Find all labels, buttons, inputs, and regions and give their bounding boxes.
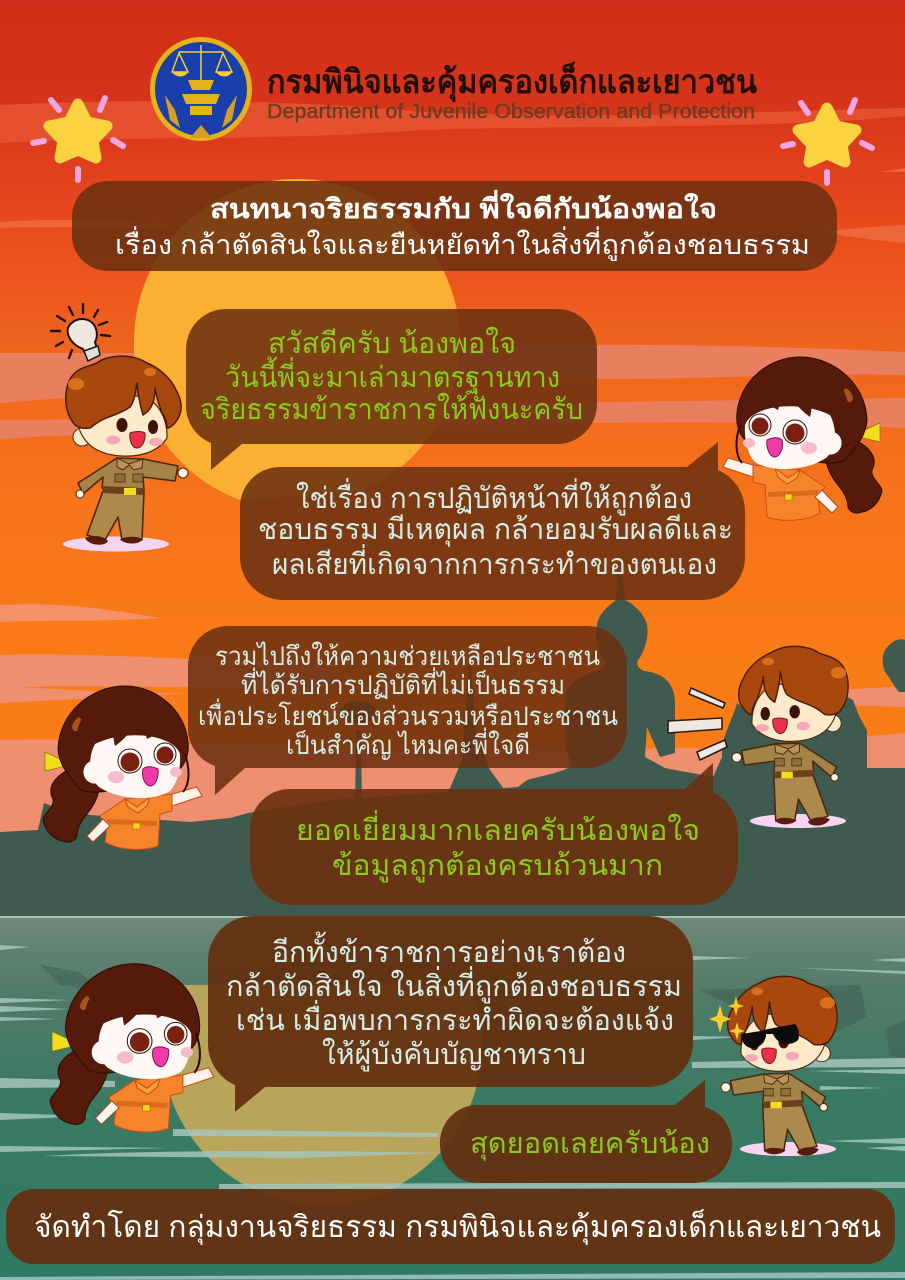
character: boy presenter (63, 356, 188, 552)
bubble text: เพื่อประโยชน์ของส่วนรวมหรือประชาชน (198, 698, 618, 731)
bubble: boy final praise (440, 1080, 732, 1183)
character: girl bottom (50, 964, 214, 1132)
silhouette: ground and temples (0, 575, 905, 917)
bubble text (258, 478, 733, 581)
bubble text: ใช่เรื่อง การปฏิบัติหน้าที่ให้ถูกต้อง (296, 478, 692, 516)
logo text Thai: กรมพินิจและคุ้มครองเด็กและเยาวชน (267, 61, 757, 103)
bubble text: ข้อมูลถูกต้องครบถ้วนมาก (332, 850, 663, 883)
bubble text: วันนี้พี่จะมาเล่ามาตรฐานทาง (225, 356, 560, 395)
bubble: girl final message (208, 916, 693, 1112)
bubble text: ยอดเยี่ยมมากเลยครับน้องพอใจ (296, 810, 700, 847)
water streaks (0, 945, 905, 1280)
icon: left star (33, 98, 123, 180)
panel: title bubble (72, 181, 837, 271)
title line 1: สนทนาจริยธรรมกับ พี่ใจดีกับน้องพอใจ (210, 189, 717, 224)
bubble: boy greeting (186, 309, 597, 470)
water reflection: temples (40, 965, 905, 1060)
tree right (883, 639, 905, 692)
sun (134, 179, 460, 500)
sun reflection (171, 985, 476, 1189)
footer bar (6, 1189, 895, 1264)
logo (150, 37, 252, 141)
bubble text: เป็นสำคัญ ไหมคะพี่ใจดี (286, 727, 530, 760)
title line 2: เรื่อง กล้าตัดสินใจและยืนหยัดทำในสิ่งที่ถูกต้องชอบธรรม (115, 226, 810, 261)
bubble text: ให้ผู้บังคับบัญชาทราบ (322, 1037, 586, 1072)
bubble text: รวมไปถึงให้ความช่วยเหลือประชาชน (215, 641, 600, 671)
bubble text (226, 931, 682, 1072)
bubble text (198, 641, 618, 760)
background: lower salmon (0, 733, 905, 840)
icon: right star (783, 100, 872, 183)
bubble text: สุดยอดเลยครับน้อง (470, 1128, 710, 1161)
bubble text: จริยธรรมข้าราชการให้ฟังนะครับ (200, 392, 583, 426)
bubble text: ผลเสียที่เกิดจากการกระทำของตนเอง (272, 544, 717, 581)
character: girl right (723, 357, 882, 520)
bubble text (200, 326, 583, 426)
background: upper streaks (0, 168, 905, 243)
bubble text (296, 810, 700, 883)
background: salmon cloud bands (0, 345, 905, 622)
character: boy with sunglasses (709, 976, 837, 1156)
footer text: จัดทำโดย กลุ่มงานจริยธรรม กรมพินิจและคุ้มครองเด็กและเยาวชน (34, 1208, 881, 1246)
sunglasses (741, 1024, 799, 1048)
bubble text: กล้าตัดสินใจ ในสิ่งที่ถูกต้องชอบธรรม (226, 966, 682, 1004)
bubble text: สวัสดีครับ น้องพอใจ (268, 326, 516, 360)
bubble: girl reply (240, 442, 745, 600)
character: girl left (43, 686, 202, 849)
bubble text: เช่น เมื่อพบการกระทำผิดจะต้องแจ้ง (236, 1000, 674, 1037)
water top line (0, 916, 905, 918)
silhouette: chedi and palm (340, 650, 512, 815)
bubble: boy praise (250, 763, 738, 905)
background: right salmon band (840, 686, 905, 707)
bubble text: ชอบธรรม มีเหตุผล กล้ายอมรับผลดีและ (258, 514, 733, 547)
bubble text: อีกทั้งข้าราชการอย่างเราต้อง (272, 931, 626, 969)
bubble text: ที่ได้รับการปฏิบัติที่ไม่เป็นธรรม (241, 667, 565, 700)
icon: light bulb (51, 304, 110, 361)
background: sky (0, 0, 905, 840)
sparkles (709, 996, 745, 1040)
bubble: girl second message (188, 626, 627, 795)
logo text English: Department of Juvenile Observation and Protection (267, 101, 755, 123)
background: mid salmon band (0, 654, 330, 703)
icon: speech strips (668, 688, 727, 760)
background: top pale cloud band (0, 101, 905, 143)
water (0, 917, 905, 1280)
character: boy right (732, 646, 848, 828)
